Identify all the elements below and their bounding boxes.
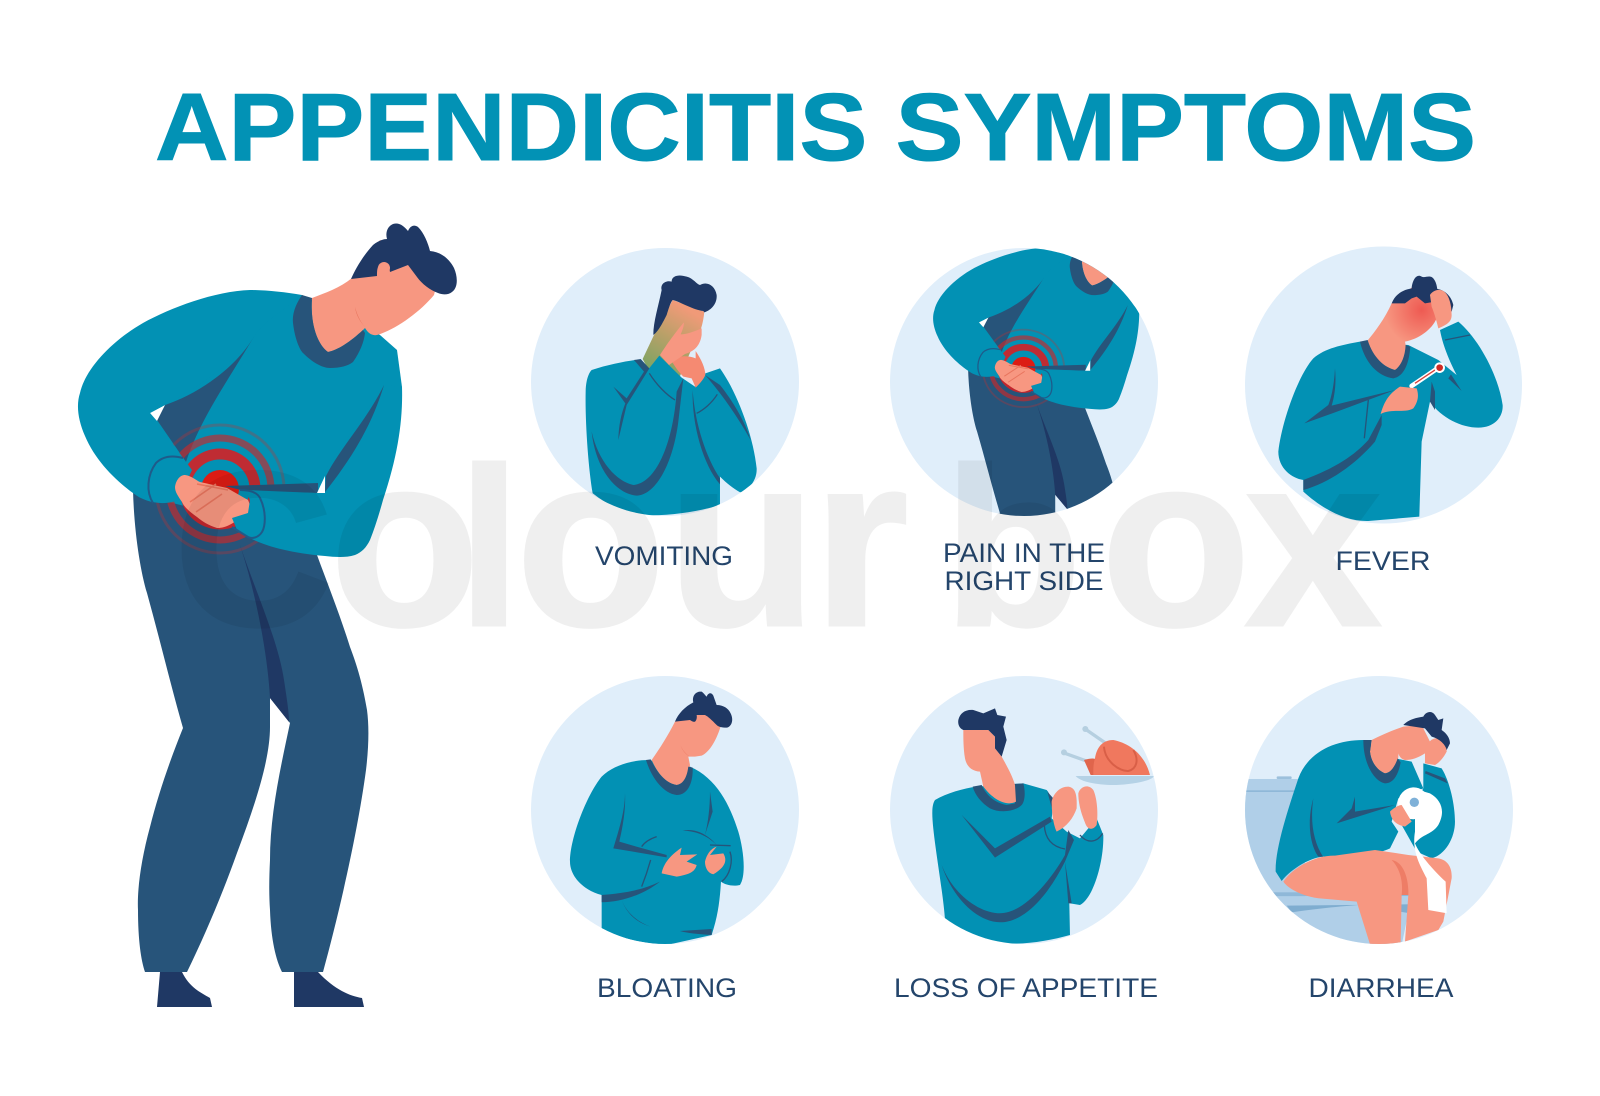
label: loss of appetite: LOSS OF APPETITE (894, 973, 1158, 1003)
label: diarrhea: DIARRHEA (1308, 973, 1454, 1003)
trousers (133, 490, 368, 972)
left arm (78, 290, 302, 503)
label: fever: FEVER (1336, 546, 1430, 576)
waist band (225, 483, 318, 493)
watermark: l (458, 421, 521, 673)
icon: torso with pain rings (933, 248, 1140, 516)
left cuff outline (148, 456, 183, 503)
icon: man feeling sick (586, 275, 757, 515)
icon: man holding bloated belly (570, 692, 744, 944)
label: vomiting: VOMITING (595, 541, 733, 571)
icon: man with thermometer (1278, 276, 1503, 521)
panel: fever (1245, 246, 1522, 576)
label: bloating: BLOATING (597, 973, 737, 1003)
trouser inner seam (240, 545, 289, 722)
circle background (890, 676, 1158, 944)
waist gap (317, 476, 325, 493)
pain rings (156, 425, 284, 553)
right forearm (232, 385, 402, 557)
neck and face (312, 240, 440, 352)
toilet (1242, 776, 1412, 945)
collar (293, 295, 365, 368)
circle background (890, 248, 1158, 516)
circle background (531, 676, 799, 944)
watermark: r (813, 403, 908, 677)
watermark: x (1245, 403, 1381, 677)
torso shadow (157, 335, 255, 462)
torso (133, 295, 402, 520)
panel: pain in the right side (890, 248, 1158, 590)
right cuff outline (232, 490, 265, 538)
watermark: b (944, 421, 1081, 673)
panel: bloating (531, 676, 799, 1003)
ear (378, 262, 390, 274)
panel: vomiting (531, 248, 799, 571)
watermark: o (330, 403, 480, 677)
hair (351, 223, 457, 294)
panel: diarrhea (1242, 676, 1513, 1003)
main figure: man holding his side (78, 223, 457, 1007)
watermark: o (516, 403, 666, 677)
label: pain in the right side: PAIN IN THE (943, 538, 1105, 568)
icon: man refusing food (932, 708, 1154, 944)
watermark: o (1101, 403, 1251, 677)
label: second line: RIGHT SIDE (944, 566, 1104, 596)
turkey on a plate (1061, 726, 1154, 785)
finger lines (190, 484, 228, 512)
watermark: C (174, 426, 333, 672)
watermark: u (667, 403, 817, 677)
chin line (355, 307, 366, 328)
title: APPENDICITIS SYMPTOMS (155, 74, 1476, 181)
circle background (1245, 246, 1522, 524)
icon: man on toilet (1242, 712, 1455, 945)
armpit gap (150, 405, 165, 421)
side shadow (325, 385, 384, 492)
left shoe (157, 972, 212, 1007)
hands (175, 475, 250, 528)
panel: loss of appetite (890, 676, 1158, 1003)
circle background (531, 248, 799, 516)
right shoe (294, 972, 364, 1007)
circle background (1245, 676, 1513, 944)
